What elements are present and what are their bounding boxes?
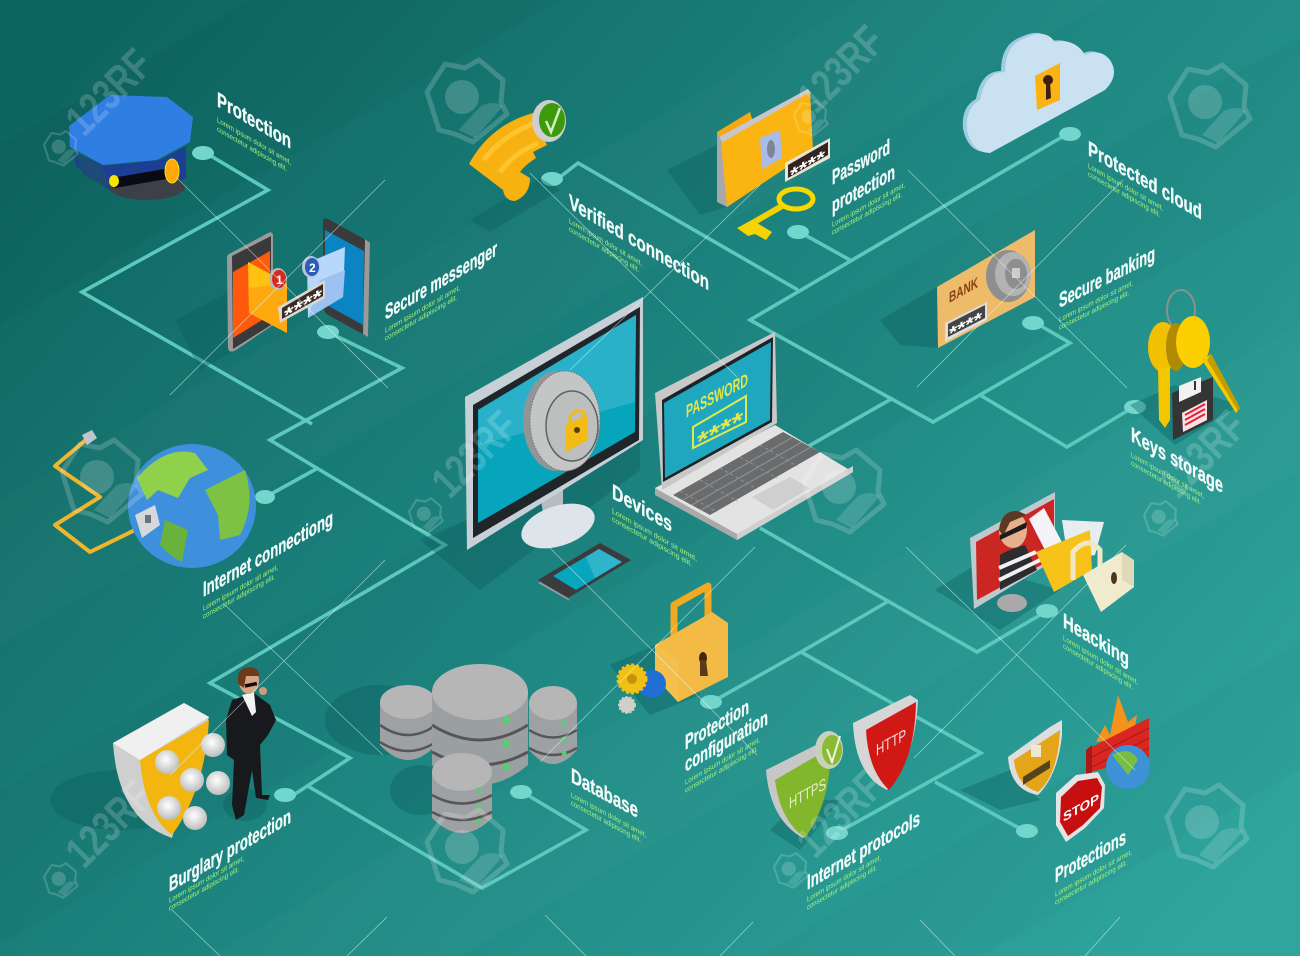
label: Password protection: Password: [832, 134, 890, 190]
icon: secure messenger phones: ****: [284, 284, 322, 328]
label: Protected cloud: Lorem ipsum dolor sit amet,: [1088, 162, 1163, 213]
watermark overlay: 123RF: [1150, 402, 1256, 507]
icon: keys and floppy: [1130, 290, 1240, 445]
label: Protection: Protection: [217, 87, 291, 154]
icon: burglary shield with balls: [50, 703, 230, 838]
label: Keys storage: [1131, 422, 1223, 519]
label: Heacking: Heacking: [1063, 608, 1129, 671]
icon: password folder and key: [667, 89, 830, 240]
watermark overlay: 123RF: [422, 402, 528, 507]
label: Protection configuration: configuration: [685, 704, 768, 777]
icon: central monitor with safe dial: [420, 297, 643, 590]
icon: padlock and gears: [610, 586, 728, 715]
label: Database: Lorem ipsum dolor sit amet,: [571, 790, 646, 839]
label: Burglary protection: [169, 804, 291, 913]
label: Protection configuration: consectetur adipiscing elit.: [685, 744, 758, 795]
label: Internet connectiong: [203, 506, 333, 621]
label: Internet protocols: Lorem ipsum dolor sit amet,: [807, 853, 881, 904]
icon: laptop: [655, 332, 853, 540]
label: Protection: consectetur adipiscing elit.: [217, 125, 287, 173]
label: Verified connection: [569, 189, 709, 315]
label: Protections: Lorem ipsum dolor sit amet,: [1055, 847, 1132, 899]
icon: HTTPS shield: [766, 731, 843, 850]
icon: protected cloud: [963, 33, 1114, 153]
label: Protections: [1055, 821, 1132, 907]
label: Verified connection: Verified connection: [569, 189, 709, 295]
label: Internet connectiong: Lorem ipsum dolor sit amet,: [203, 562, 278, 613]
icon: password folder and key: ****: [790, 146, 825, 187]
icon: laptop: ****: [697, 406, 743, 457]
label: Protected cloud: consectetur adipiscing elit.: [1088, 170, 1160, 219]
label: Devices: consectetur adipiscing elit.: [612, 515, 692, 568]
icon: database cylinders: [325, 664, 577, 833]
label: Burglary protection: Burglary protection: [169, 804, 291, 897]
label: Database: Database: [571, 763, 638, 823]
watermark overlay: 123RF: [787, 762, 893, 867]
label: Burglary protection: consectetur adipiscing elit.: [169, 865, 239, 913]
label: Password protection: consectetur adipiscing elit.: [832, 190, 902, 237]
label: Protections: consectetur adipiscing elit.: [1055, 858, 1127, 907]
label: Devices: [612, 479, 697, 571]
icon: globe with cable: [55, 430, 256, 568]
label: Protection: Lorem ipsum dolor sit amet,: [217, 116, 291, 167]
icon: protections shield, wall, globe and stop sign: STOP: [1063, 790, 1099, 825]
icon: police cap: [69, 95, 193, 200]
label: Protection configuration: Lorem ipsum dolor sit amet,: [685, 735, 760, 787]
label: Secure messenger: Secure messenger: [385, 236, 497, 325]
icon: HTTPS shield: HTTPS: [789, 774, 826, 813]
icon: security guard: [223, 667, 276, 821]
label: Heacking: consectetur adipiscing elit.: [1063, 642, 1133, 692]
label: Secure banking: consectetur adipiscing elit.: [1059, 288, 1129, 332]
icon: protections shield, wall, globe and stop sign: [960, 695, 1150, 842]
watermark overlay: 123RF: [56, 40, 162, 145]
label: Keys storage: Lorem ipsum dolor sit amet,: [1131, 451, 1204, 500]
label: Burglary protection: Lorem ipsum dolor sit amet,: [169, 854, 244, 905]
icon: secure messenger phones: 2: [309, 261, 316, 275]
label: Secure messenger: Lorem ipsum dolor sit amet,: [385, 283, 460, 335]
label: Heacking: Lorem ipsum dolor sit amet,: [1063, 634, 1138, 687]
label: Protection configuration: Protection: [685, 693, 749, 755]
label: Internet protocols: Internet protocols: [807, 805, 920, 895]
label: Internet protocols: [807, 805, 920, 912]
label: Protections: Protections: [1055, 825, 1126, 888]
label: Keys storage: Keys storage: [1131, 422, 1223, 498]
icon: wifi with check badge: [469, 100, 566, 232]
icon: hacker monitor with padlock: [935, 492, 1134, 630]
label: Password protection: [832, 126, 905, 237]
label: Password protection: Lorem ipsum dolor sit amet,: [832, 180, 905, 229]
label: Protected cloud: Protected cloud: [1088, 136, 1202, 225]
label: Keys storage: consectetur adipiscing elit.: [1131, 459, 1201, 507]
label: Secure banking: [1059, 241, 1155, 332]
flow connector lines: [82, 137, 1127, 888]
icon: HTTP shield: [853, 695, 918, 790]
icon: bank card safe: [880, 230, 1035, 348]
label: Internet protocols: consectetur adipiscing elit.: [807, 863, 877, 912]
label: Secure messenger: consectetur adipiscing elit.: [385, 293, 457, 343]
label: Secure banking: Secure banking: [1059, 241, 1155, 313]
label: Protection: [217, 87, 291, 176]
label: Password protection: protection: [832, 160, 895, 218]
icon: laptop: PASSWORD: [686, 370, 748, 423]
label: Protection configuration: [685, 682, 768, 795]
icon: secure messenger phones: 1: [276, 273, 283, 287]
watermark overlay: 123RF: [56, 772, 162, 877]
label: Devices: Lorem ipsum dolor sit amet,: [612, 507, 697, 563]
icon: bank card safe: ****: [949, 307, 983, 344]
label: Secure banking: Lorem ipsum dolor sit amet,: [1059, 278, 1133, 324]
label: Database: consectetur adipiscing elit.: [571, 798, 641, 845]
icon: HTTP shield: HTTP: [876, 725, 906, 760]
icon: secure messenger phones: [175, 218, 370, 370]
icon: bank card safe: BANK: [949, 274, 978, 307]
watermark crosshair lines: [170, 170, 1135, 956]
label: Internet connectiong: consectetur adipiscing elit.: [203, 572, 275, 621]
label: Verified connection: Lorem ipsum dolor sit amet,: [569, 217, 642, 268]
connector dots: [192, 127, 1146, 840]
label: Protected cloud: [1088, 136, 1202, 243]
icon: smartphone: [538, 543, 631, 601]
label: Devices: Devices: [612, 479, 672, 537]
label: Internet connectiong: Internet connectiong: [203, 506, 333, 602]
label: Secure messenger: [385, 236, 497, 343]
label: Verified connection: consectetur adipiscing elit.: [569, 225, 639, 274]
